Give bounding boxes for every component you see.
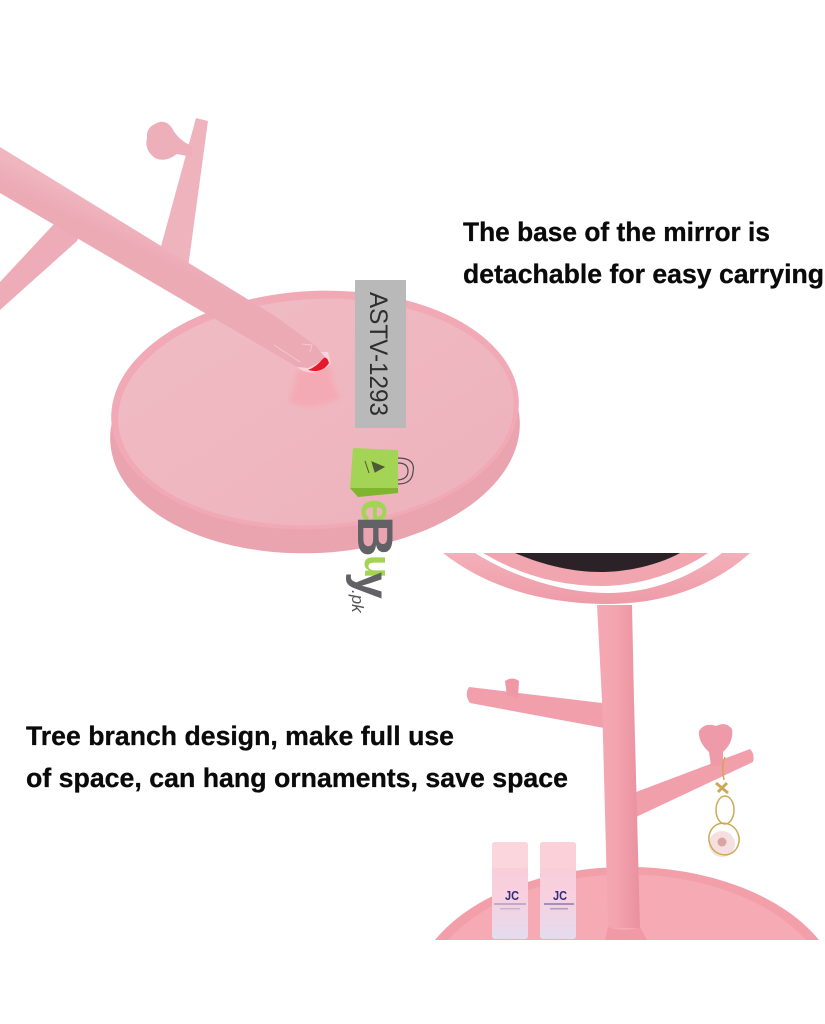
base side wall [104, 298, 526, 564]
logo letters: e [352, 499, 403, 524]
watermark: eBuy.pk logo [345, 448, 413, 614]
tray [435, 867, 819, 940]
watermark: eBuy.pk logo: B [347, 516, 403, 557]
watermark: product code label: ASTV-1293 [364, 292, 392, 416]
trunk [597, 605, 640, 928]
heading: tree branch design: Tree branch design, make full use [26, 721, 454, 751]
earring [704, 757, 744, 859]
icon: shopping bag [350, 448, 398, 497]
heart ornament [699, 724, 732, 766]
heading: detachable base [463, 217, 824, 289]
bottle right [540, 842, 576, 939]
heading: tree branch design: of space, can hang ornaments, save space [26, 763, 568, 793]
product photo: assembled mirror with branches [435, 553, 819, 940]
left branch [467, 687, 610, 728]
socket post [288, 366, 340, 406]
product photo: detached mirror base [0, 118, 526, 564]
side branch [0, 222, 79, 310]
main arm [0, 147, 325, 368]
branch stub [505, 678, 519, 698]
pearl [709, 831, 735, 857]
mirror outer ring [443, 553, 750, 604]
heading: detachable base: detachable for easy carrying [463, 259, 824, 289]
watermark: product code label [355, 280, 406, 428]
mirror inner surround [483, 553, 708, 586]
bottle left [492, 842, 528, 939]
heading: tree branch design [26, 721, 568, 793]
mirror glass [515, 553, 680, 572]
watermark: eBuy.pk logo: y [345, 572, 398, 599]
bottle left: JC [505, 888, 520, 903]
heading: detachable base: The base of the mirror is [463, 217, 770, 247]
heart ornament [146, 122, 192, 160]
upper branch [160, 118, 208, 268]
bottle right: JC [553, 888, 568, 903]
socket hole [296, 352, 331, 373]
watermark: eBuy.pk logo: .pk [348, 590, 367, 614]
base rim [105, 280, 525, 540]
icon: handles [398, 458, 413, 484]
trunk foot [605, 927, 647, 940]
watermark: eBuy.pk logo: u [356, 555, 398, 578]
base tray surface [112, 289, 520, 535]
right branch [636, 749, 754, 817]
